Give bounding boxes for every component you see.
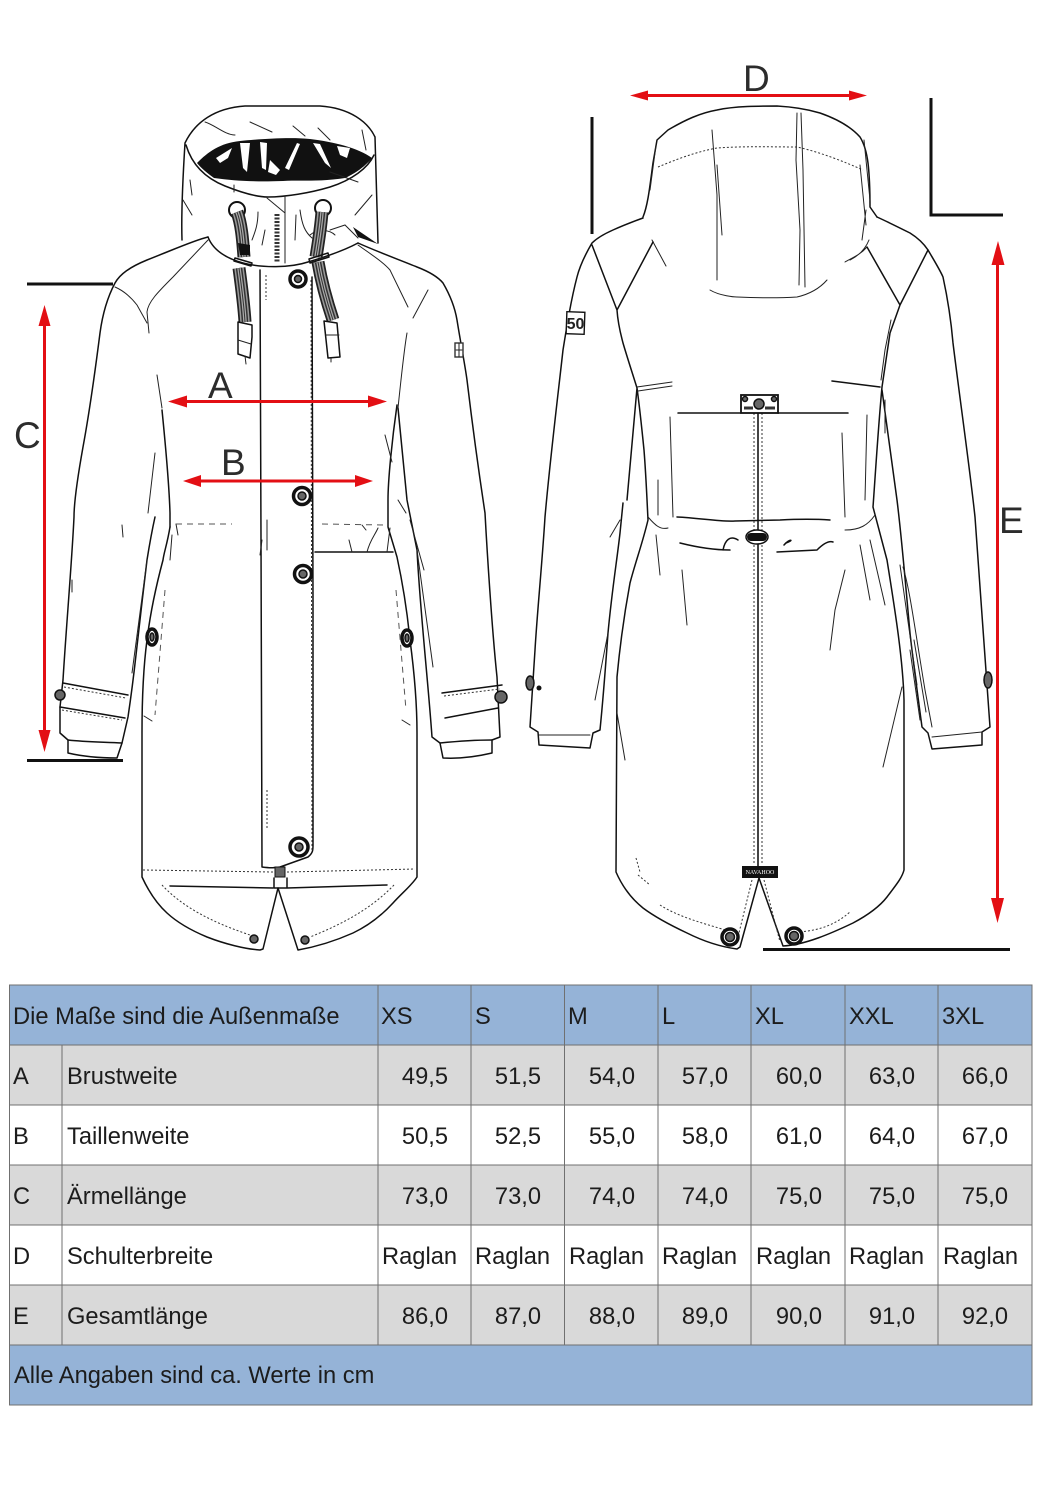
row A Brustweite: A (13, 1064, 29, 1090)
table header row: XXL (849, 1004, 894, 1030)
measurement letter E: E (999, 500, 1024, 541)
row B Taillenweite: 50,5 (402, 1124, 448, 1150)
sleeve badge (455, 343, 463, 357)
sleeve badge back: 50 (567, 316, 584, 333)
table header row: M (568, 1004, 588, 1030)
front collar and zipper (208, 197, 378, 267)
table header row: XS (381, 1004, 413, 1030)
row A Brustweite: 49,5 (402, 1064, 448, 1090)
row E Gesamtlänge: 88,0 (589, 1304, 635, 1330)
row E Gesamtlänge: 92,0 (962, 1304, 1008, 1330)
row A Brustweite: 51,5 (495, 1064, 541, 1090)
row C Ärmellänge: 73,0 (495, 1184, 541, 1210)
row C Ärmellänge (13, 1183, 1008, 1210)
row E Gesamtlänge: E (13, 1304, 29, 1330)
row B Taillenweite: 52,5 (495, 1124, 541, 1150)
row D Schulterbreite: Raglan (475, 1244, 550, 1270)
row C Ärmellänge: 74,0 (589, 1184, 635, 1210)
front placket (260, 270, 313, 868)
row D Schulterbreite: Schulterbreite (67, 1244, 213, 1270)
row A Brustweite: Brustweite (67, 1064, 178, 1090)
table header row: S (475, 1004, 491, 1030)
row E Gesamtlänge: 86,0 (402, 1304, 448, 1330)
front cuffs (55, 683, 507, 743)
measurement letter C: C (14, 415, 41, 456)
front hood (182, 106, 378, 243)
row D Schulterbreite: Raglan (569, 1244, 644, 1270)
size table (10, 985, 1032, 1405)
back hood (643, 106, 877, 298)
row B Taillenweite: 58,0 (682, 1124, 728, 1150)
back yoke and waist details (617, 381, 932, 767)
row E Gesamtlänge: 91,0 (869, 1304, 915, 1330)
back waist toggle (746, 530, 768, 544)
table header row: L (662, 1004, 675, 1030)
row D Schulterbreite: Raglan (943, 1244, 1018, 1270)
back centre zipper (754, 413, 762, 878)
arrow C (38, 305, 50, 752)
row C Ärmellänge: C (13, 1184, 30, 1210)
arrow B (183, 475, 373, 487)
row E Gesamtlänge (13, 1304, 1008, 1330)
table footer note: Alle Angaben sind ca. Werte in cm (14, 1363, 374, 1389)
table header row: XL (755, 1004, 784, 1030)
brand label (742, 866, 778, 878)
row A Brustweite: 60,0 (776, 1064, 822, 1090)
row C Ärmellänge: 73,0 (402, 1184, 448, 1210)
row A Brustweite: 63,0 (869, 1064, 915, 1090)
front hem and waist details (143, 524, 415, 937)
row D Schulterbreite: D (13, 1244, 30, 1270)
measurement letter B: B (221, 442, 246, 483)
row B Taillenweite: 61,0 (776, 1124, 822, 1150)
row D Schulterbreite: Raglan (849, 1244, 924, 1270)
row B Taillenweite: 67,0 (962, 1124, 1008, 1150)
row E Gesamtlänge: Gesamtlänge (67, 1304, 208, 1330)
row C Ärmellänge: 75,0 (869, 1184, 915, 1210)
front view of jacket (55, 106, 507, 950)
arrow E (991, 241, 1004, 923)
front drawstrings (229, 200, 340, 364)
back hem buttons and stitching (636, 858, 850, 945)
arrow A (168, 396, 387, 408)
back view of jacket (526, 106, 992, 949)
brand label: NAVAHOO (746, 870, 775, 876)
measurement guide lines (27, 98, 1010, 950)
measurement letter A: A (208, 365, 233, 406)
row D Schulterbreite: Raglan (382, 1244, 457, 1270)
row B Taillenweite: 64,0 (869, 1124, 915, 1150)
row D Schulterbreite: Raglan (756, 1244, 831, 1270)
back sleeve cuffs (526, 633, 992, 737)
row E Gesamtlänge: 89,0 (682, 1304, 728, 1330)
back body outline (530, 217, 990, 949)
arrow D (630, 90, 867, 100)
front buttons (147, 271, 412, 944)
table header row: Die Maße sind die Außenmaße (13, 1004, 340, 1030)
row C Ärmellänge: Ärmellänge (67, 1183, 187, 1210)
table header row: 3XL (942, 1004, 984, 1030)
front body outline (60, 237, 500, 950)
row E Gesamtlänge: 90,0 (776, 1304, 822, 1330)
row E Gesamtlänge: 87,0 (495, 1304, 541, 1330)
row C Ärmellänge: 74,0 (682, 1184, 728, 1210)
row D Schulterbreite (13, 1244, 1018, 1270)
table header row (13, 1004, 984, 1030)
row A Brustweite: 57,0 (682, 1064, 728, 1090)
row B Taillenweite: 55,0 (589, 1124, 635, 1150)
back zipper label top (741, 395, 778, 413)
row C Ärmellänge: 75,0 (962, 1184, 1008, 1210)
row A Brustweite (13, 1064, 1008, 1090)
measurement letter D: D (743, 58, 770, 99)
row C Ärmellänge: 75,0 (776, 1184, 822, 1210)
row A Brustweite: 66,0 (962, 1064, 1008, 1090)
row B Taillenweite: B (13, 1124, 29, 1150)
table backgrounds (10, 985, 1032, 1405)
table grid lines (10, 985, 1032, 1405)
row D Schulterbreite: Raglan (662, 1244, 737, 1270)
row B Taillenweite: Taillenweite (67, 1124, 189, 1150)
row A Brustweite: 54,0 (589, 1064, 635, 1090)
row B Taillenweite (13, 1124, 1008, 1150)
